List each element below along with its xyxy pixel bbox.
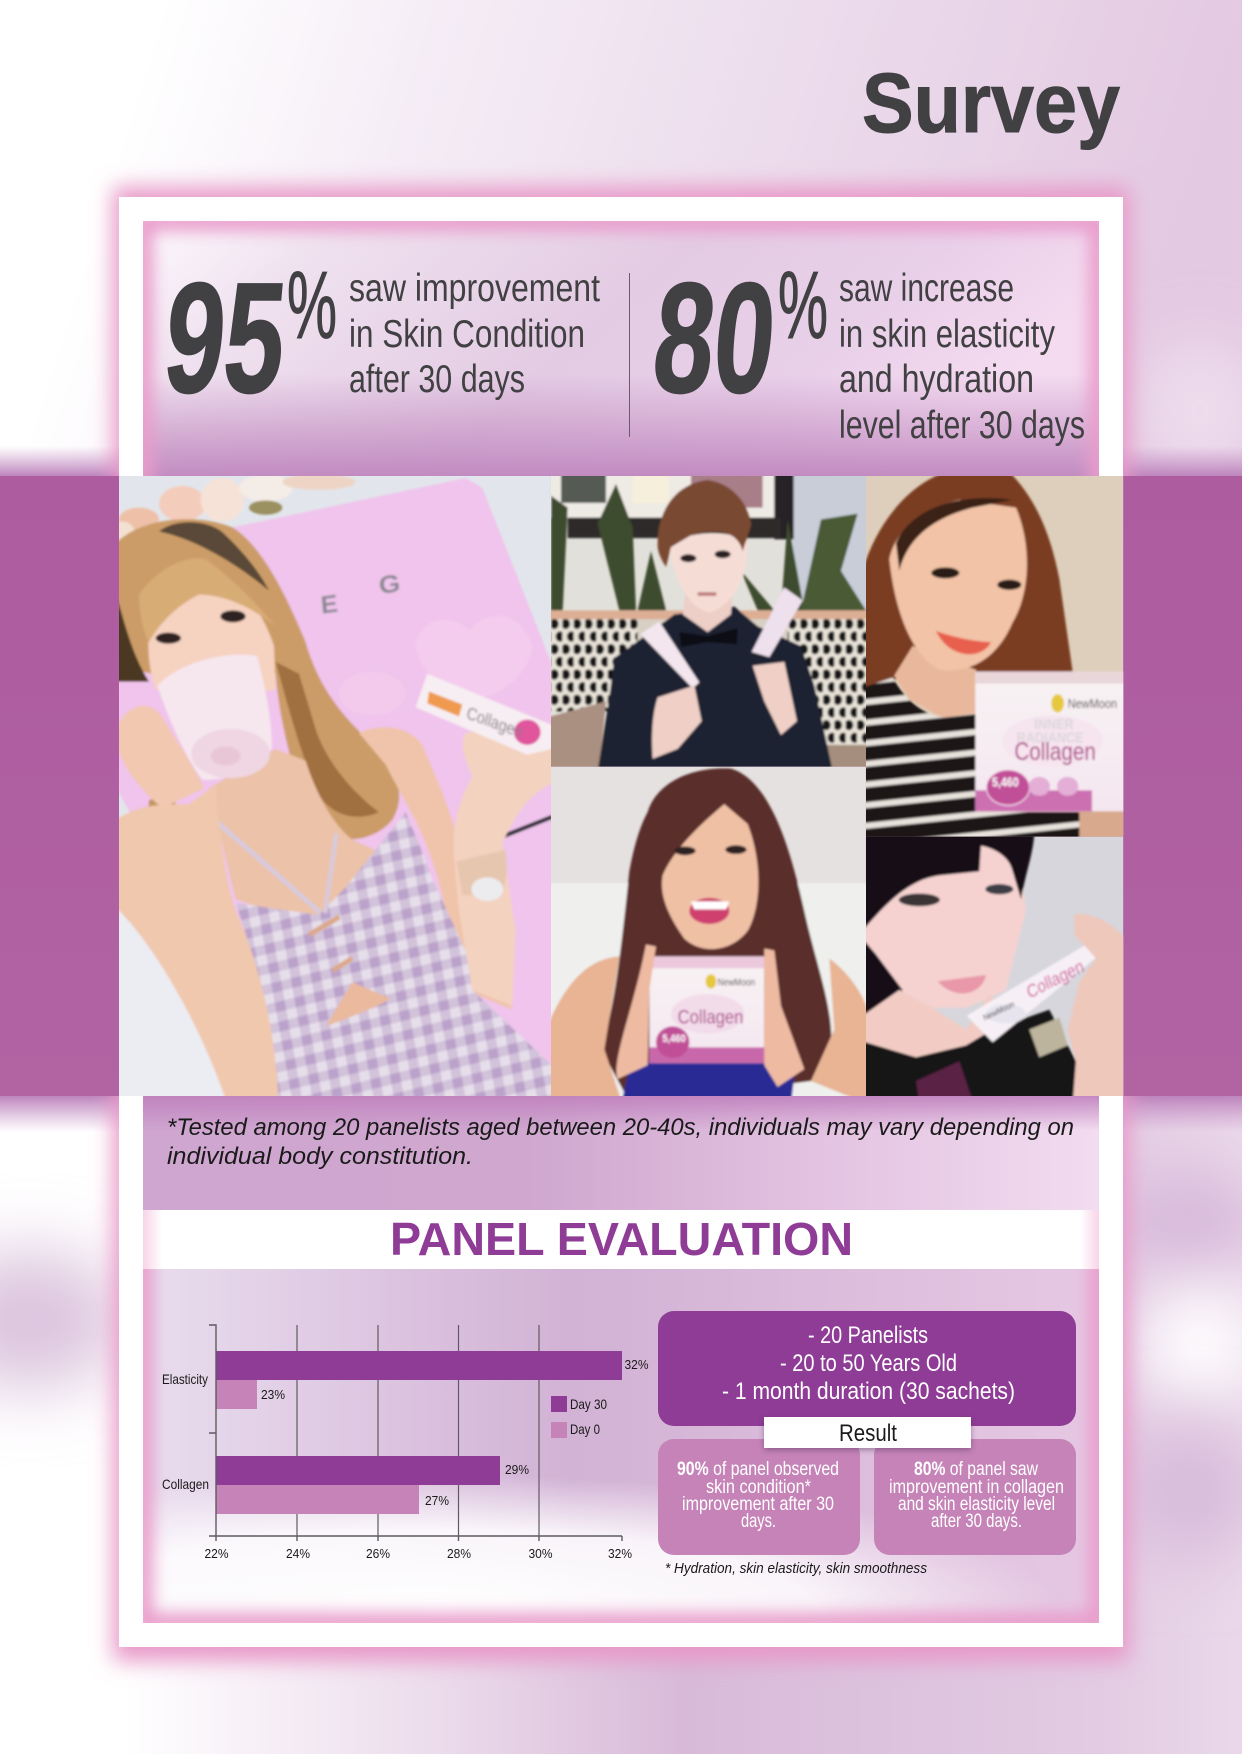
collagen box: Collagen [678,1005,743,1028]
hair [863,834,1034,931]
flowers [119,476,356,540]
watch [456,850,507,895]
panel: survey statistics [143,221,1099,476]
purple band behind photos [0,476,1242,1096]
top [863,1010,1079,1105]
photo: woman holding sachet: NewMoon [982,999,1016,1023]
collagen box: NewMoon [718,977,755,987]
collagen box: INNER [1034,715,1074,732]
x axis labels: 26% [366,1546,390,1561]
stat: 95 percent: 95 [158,251,292,426]
outer card glow [113,187,1129,1661]
face [662,804,758,949]
photo collage [109,472,1128,1109]
striped top [863,678,1081,842]
collagen box: Collagen [1014,737,1096,765]
fridge [112,478,556,1109]
disclaimer note: individual body constitution. [167,1143,473,1170]
result label [764,1417,971,1450]
plants [551,484,866,610]
photo: smiling woman with collagen box [863,472,1128,842]
bar chart [162,1325,649,1561]
stat: 80 percent: 80 [647,251,782,426]
stat: 95 percent: after 30 days [349,358,525,401]
long hair [601,768,831,1105]
stat: 95 percent: % [287,252,337,359]
x axis labels [204,1546,632,1561]
value labels: 29% [505,1462,529,1477]
panel details box: - 20 to 50 Years Old [780,1350,957,1377]
photo: man with two sachets [548,472,873,771]
category labels: Collagen [162,1476,209,1492]
x axis labels: 30% [528,1546,553,1561]
sofa [548,616,638,711]
panel details box: - 1 month duration (30 sachets) [722,1378,1015,1405]
bow tie [679,628,738,647]
value labels: 32% [624,1357,649,1372]
result box left [658,1439,860,1555]
chest and neck [209,749,379,915]
collagen box: 5,460 [992,776,1019,790]
value labels: 23% [261,1387,285,1402]
panel: evaluation [0,1096,1099,1745]
dress [236,812,556,1109]
collagen box [975,672,1127,811]
divider [629,273,630,437]
collagen box [649,956,764,1063]
result box right [874,1439,1076,1555]
gridlines [297,1325,539,1536]
stat: 80 percent: and hydration [839,358,1034,401]
shoulder and far arm [359,727,512,1010]
result box left: days. [741,1511,776,1532]
white card [119,197,1123,1647]
hands [616,945,656,1079]
chest [863,990,1019,1065]
bars [216,1351,622,1514]
hand on mug [116,706,204,808]
photo: woman drinking from mug: Collagen [465,704,525,742]
legend: Day 30 [570,1396,607,1412]
hands [652,686,702,759]
photo: woman holding sachet [863,834,1128,1105]
fridge lettering: G [378,569,401,599]
category labels [162,1371,209,1492]
face [669,533,748,612]
x axis labels: 32% [608,1546,632,1561]
result box right: 80% of panel saw [914,1459,1038,1480]
heading strip: PANEL EVALUATION [390,1213,853,1265]
result label: Result [839,1420,897,1447]
collagen box: NewMoon [1068,696,1117,711]
photo: woman holding sachet: Collagen [1024,956,1086,1003]
right hand and forearm [454,732,556,1006]
face [147,593,276,692]
result box right: and skin elasticity level [898,1494,1055,1515]
sachet [416,674,552,755]
panel details box: - 20 Panelists [808,1322,928,1349]
neck [683,591,733,632]
result box right: improvement in collagen [889,1477,1064,1498]
stat: 80 percent: in skin elasticity [839,313,1055,356]
value labels: 27% [425,1493,449,1508]
collagen box: 5,460 [662,1034,686,1045]
legend [551,1396,607,1438]
photo: woman drinking from mug [109,474,556,1109]
stat: 80 percent: saw increase [839,267,1014,310]
hair [863,472,1073,688]
hand [1068,914,1128,1105]
shoulders [548,956,623,1105]
hair behind [116,519,399,839]
stat: 95 percent: saw improvement [349,267,600,310]
fridge lettering: E [320,590,339,620]
disclaimer note: *Tested among 20 panelists aged between 20-40s, individuals may vary depending on [167,1114,1074,1141]
face [889,500,1027,670]
category labels: Elasticity [162,1371,208,1387]
mug [157,655,272,780]
near arm [116,784,279,1109]
result box left: skin condition* [706,1477,812,1498]
stat: 80 percent: % [778,252,828,359]
man's shirt [598,606,833,771]
x axis labels: 22% [204,1546,229,1561]
blue top [621,1061,796,1105]
heading strip [143,1210,1099,1269]
photo: woman holding collagen box [548,767,869,1105]
face [863,834,1026,1008]
x axis labels: 24% [286,1546,310,1561]
stat: 80 percent [647,251,1085,447]
picture frame [548,472,778,518]
legend: Day 0 [570,1421,600,1437]
panel details box [658,1311,1076,1426]
stat: 95 percent [158,251,600,426]
neck [894,646,979,718]
disclaimer note [167,1114,1074,1170]
value labels [261,1357,649,1508]
sachets [640,622,699,688]
footnote: * Hydration, skin elasticity, skin smoothness [665,1560,927,1577]
sachet [967,939,1100,1042]
result box left: 90% of panel observed [677,1459,839,1480]
axes [209,1325,622,1541]
title: Survey [862,56,1120,150]
result box right: after 30 days. [931,1511,1022,1532]
x axis labels: 28% [447,1546,471,1561]
stat: 95 percent: in Skin Condition [349,313,585,356]
stat: 80 percent: level after 30 days [839,404,1085,447]
fridge lettering [320,574,400,614]
hair [658,480,751,567]
result box left: improvement after 30 [682,1494,834,1515]
collagen box: RADIANCE [1017,728,1083,746]
